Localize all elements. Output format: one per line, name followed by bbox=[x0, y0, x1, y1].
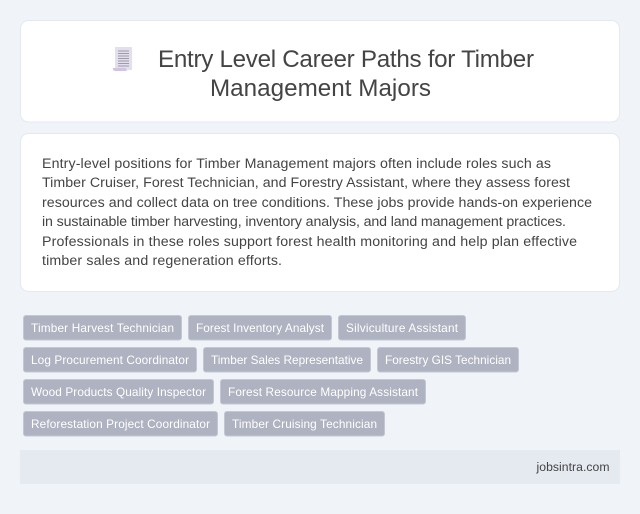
footer source: jobsintra.com bbox=[536, 460, 610, 474]
tag: Forest Inventory Analyst bbox=[196, 321, 325, 335]
tag: Timber Harvest Technician bbox=[31, 321, 174, 335]
text block bbox=[42, 156, 592, 269]
tag: Forest Resource Mapping Assistant bbox=[228, 385, 419, 399]
tag: Timber Cruising Technician bbox=[232, 417, 377, 431]
tag: Silviculture Assistant bbox=[346, 321, 459, 335]
tag bbox=[220, 380, 426, 404]
tag: Timber Sales Representative bbox=[211, 353, 363, 367]
tag bbox=[204, 348, 370, 372]
text block: in sustainable timber harvesting, inventory analysis, and land management practices. bbox=[42, 214, 566, 230]
tag: Reforestation Project Coordinator bbox=[31, 417, 210, 431]
panel: description bbox=[20, 134, 620, 292]
tag: Log Procurement Coordinator bbox=[31, 353, 189, 367]
text block: timber sales and regeneration efforts. bbox=[42, 253, 282, 269]
text block: Professionals in these roles support forest health monitoring and help plan effective bbox=[42, 234, 577, 250]
tag bbox=[24, 316, 182, 340]
tag: Wood Products Quality Inspector bbox=[31, 385, 206, 399]
text block: resources and collect data on tree conditions. These jobs provide hands-on experience bbox=[42, 195, 592, 211]
footer bbox=[20, 450, 620, 484]
heading bbox=[158, 46, 534, 102]
text block: Entry-level positions for Timber Management majors often include roles such as bbox=[42, 156, 551, 172]
tag bbox=[24, 348, 196, 372]
heading: Entry Level Career Paths for Timber bbox=[158, 46, 534, 73]
tag list bbox=[24, 316, 518, 436]
tag bbox=[188, 316, 332, 340]
tag bbox=[224, 412, 384, 436]
heading: Management Majors bbox=[210, 75, 431, 102]
tag bbox=[378, 348, 518, 372]
panel: title bbox=[20, 20, 620, 122]
tag bbox=[24, 380, 214, 404]
icon: document scroll bbox=[113, 47, 132, 71]
tag: Forestry GIS Technician bbox=[385, 353, 511, 367]
text block: Timber Cruiser, Forest Technician, and Forestry Assistant, where they assess forest bbox=[42, 175, 570, 191]
tag bbox=[24, 412, 218, 436]
tag bbox=[338, 316, 466, 340]
